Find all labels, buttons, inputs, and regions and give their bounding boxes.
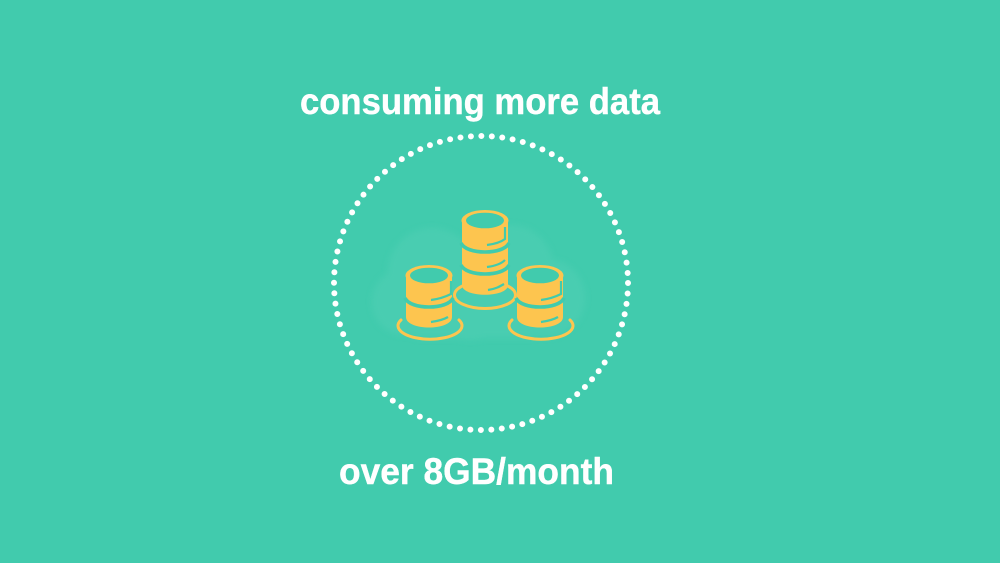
left drum base ring [398, 320, 462, 339]
right drum base ring [509, 320, 573, 339]
left drum [405, 265, 453, 328]
dotted circle [334, 136, 628, 430]
centre drum [461, 210, 509, 295]
caption: over 8GB/month: over 8GB/month [339, 451, 614, 492]
right drum [516, 265, 564, 328]
centre drum base ring [454, 282, 516, 308]
heading: consuming more data: consuming more data [300, 81, 660, 122]
icon: cloud silhouette [372, 225, 585, 340]
icon: data drum stacks [398, 210, 573, 339]
